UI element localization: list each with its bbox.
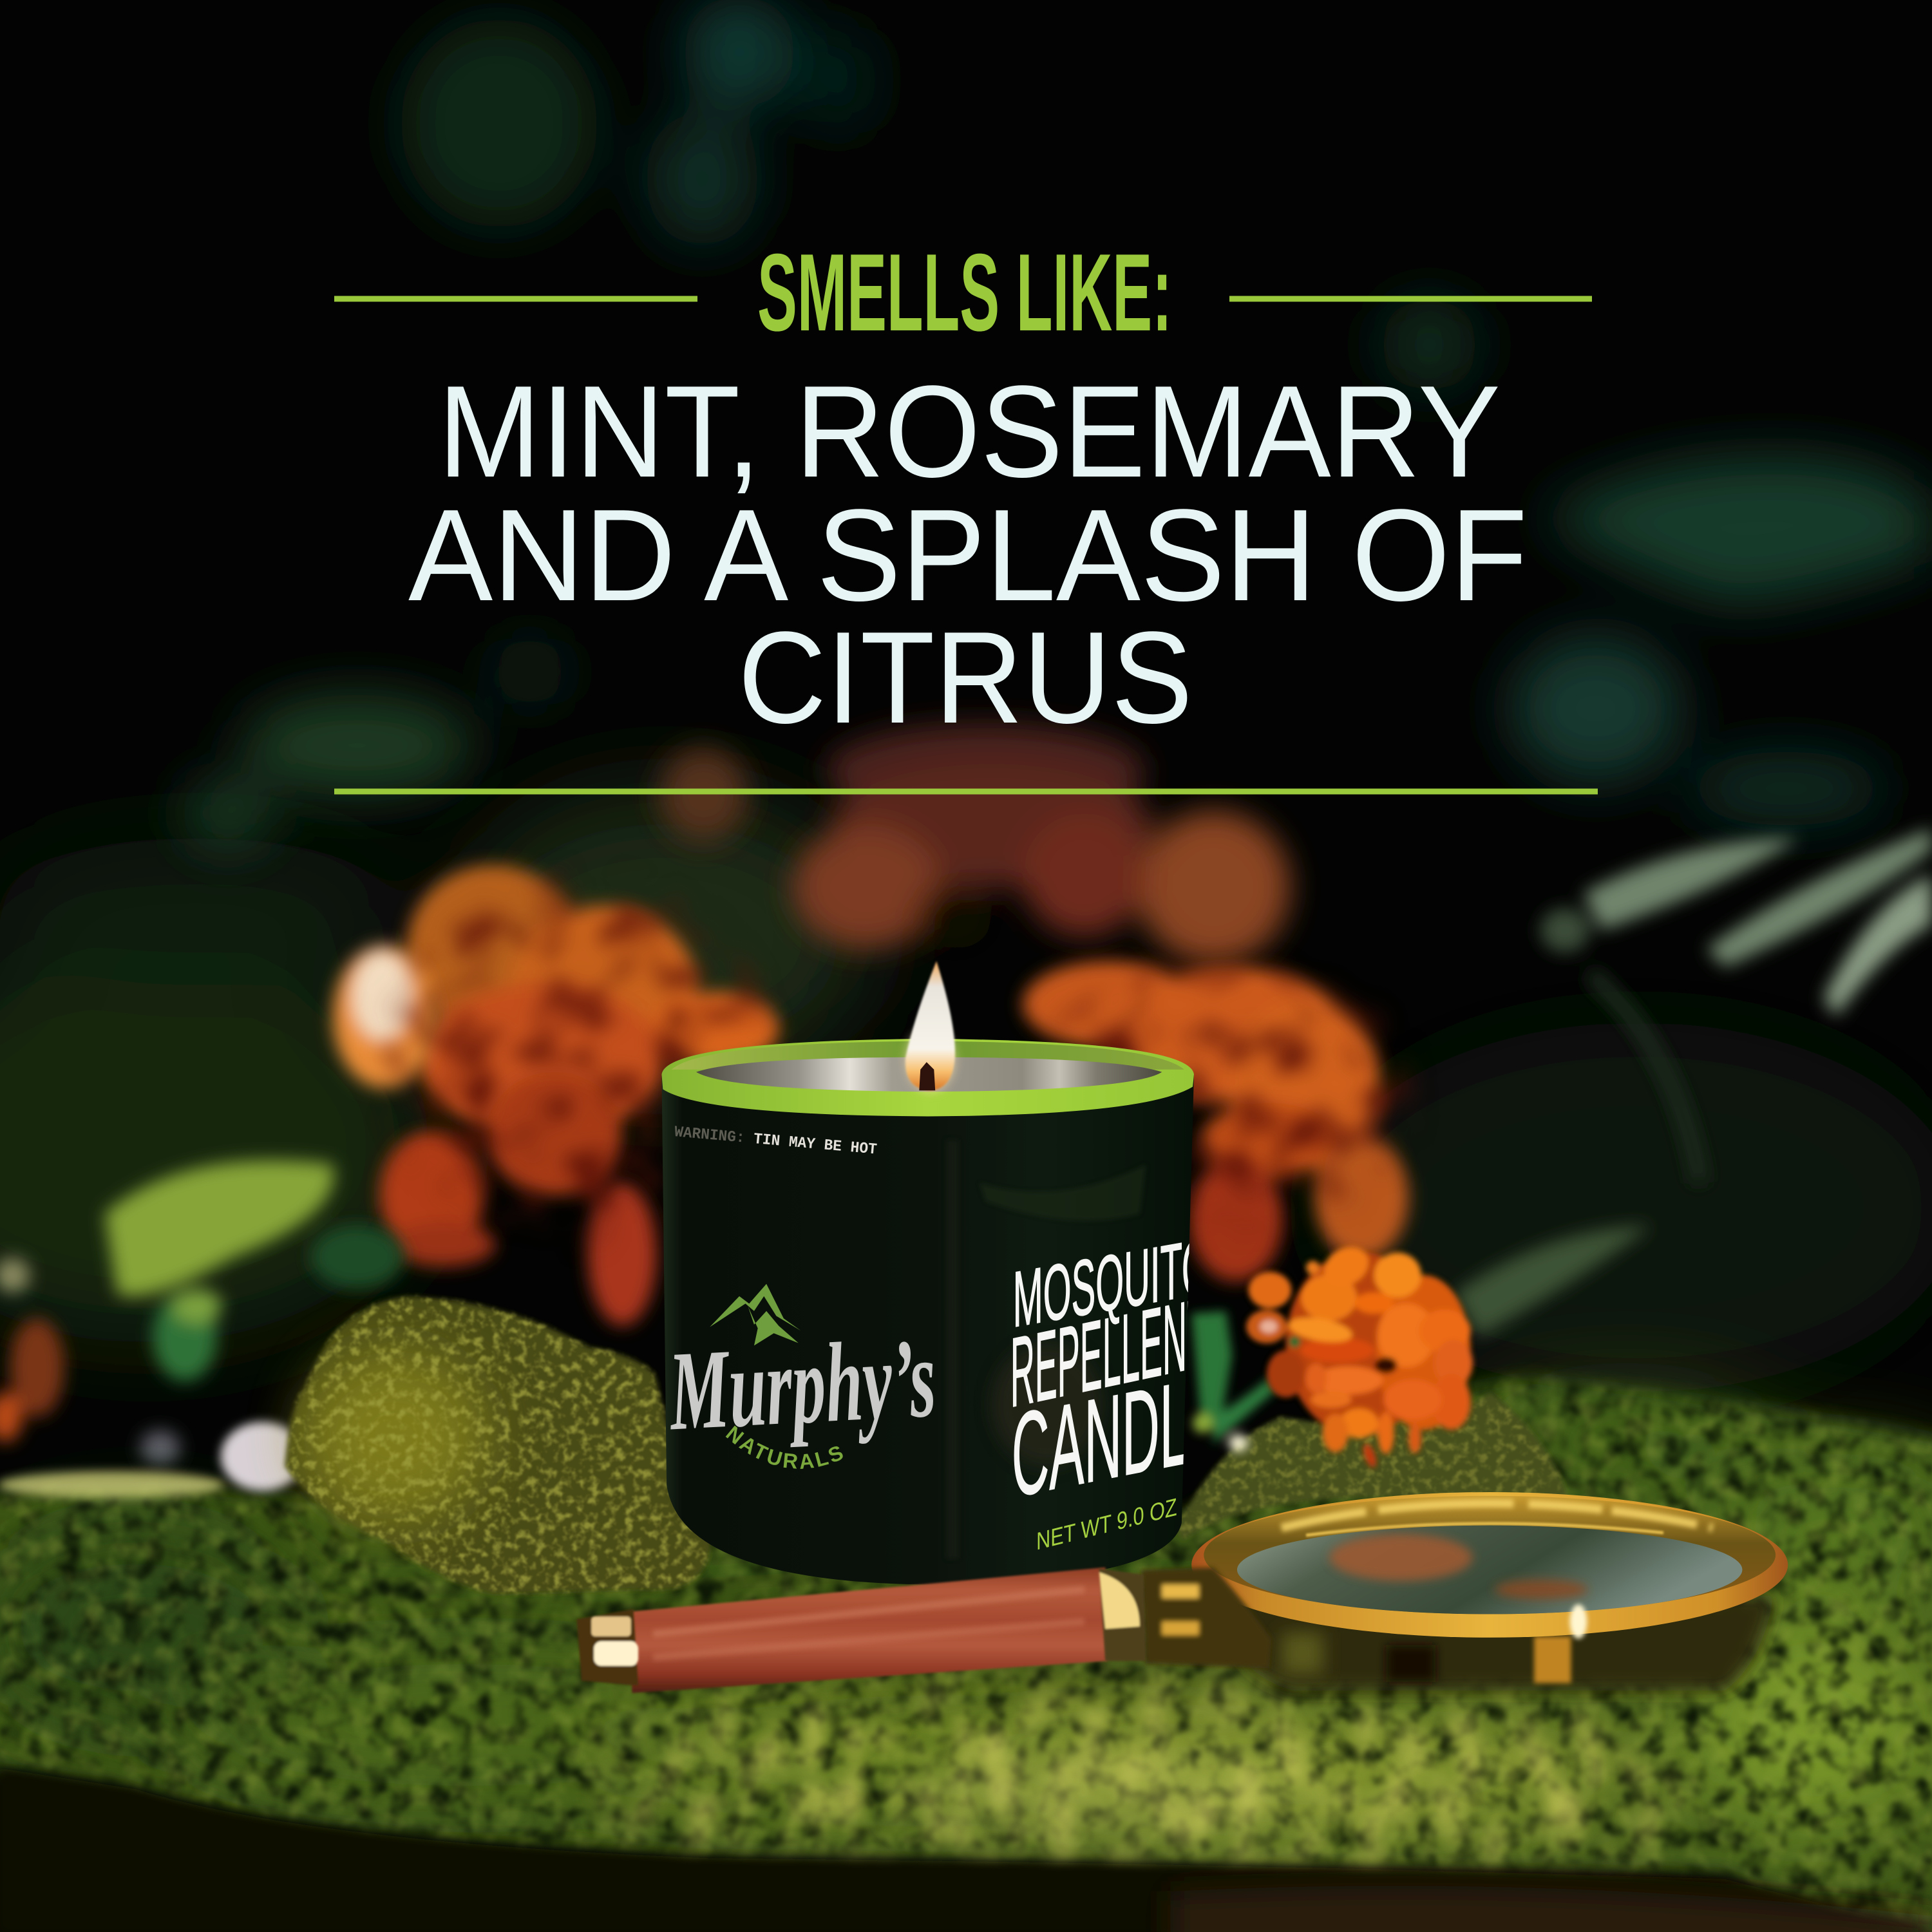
tin label artwork: MOSQUITO [1013, 1221, 1210, 1344]
bottom rule [334, 788, 1598, 795]
blurred foliage backdrop [0, 0, 1932, 1392]
photo background with candle scene: REPELLENT [1010, 1276, 1208, 1428]
rim highlights [1282, 1503, 1712, 1528]
title group: smells like [334, 231, 1592, 354]
net weight: NET WT 9.0 OZ (255g) [1036, 1478, 1240, 1556]
background orange flowers [333, 723, 1408, 1326]
left rule [334, 296, 697, 301]
lichen clump right of candle [1177, 1392, 1567, 1540]
scent description text: AND A SPLASH OF [408, 482, 1528, 629]
orange marigold flower [1246, 1239, 1473, 1469]
handle end cap [576, 1609, 638, 1685]
logo wordmark: Murphy’s [665, 1315, 938, 1454]
mountain logo [710, 1284, 801, 1345]
magnifying glass [576, 1492, 1788, 1693]
candle tin [661, 1039, 1194, 1584]
scent description text: MINT, ROSEMARY [438, 359, 1501, 505]
lichen clump left of candle [285, 1296, 711, 1595]
scent description text: CITRUS [738, 605, 1193, 751]
moss covered log [0, 1378, 1932, 1932]
heading: smells like: SMELLS LIKE: [757, 231, 1172, 354]
tin body [661, 1074, 1194, 1585]
warning text: WARNING: TIN MAY BE HOT [674, 1124, 878, 1159]
lens glass [1237, 1526, 1742, 1614]
tin label artwork [674, 1124, 1240, 1558]
candle flame [905, 961, 955, 1092]
logo naturals text: NATURALS [725, 1426, 843, 1469]
handle neck [1141, 1567, 1272, 1669]
green stem behind flower [1191, 1311, 1276, 1452]
product name [1010, 1221, 1224, 1522]
right rule [1229, 296, 1592, 301]
tin opening [696, 1057, 1162, 1092]
background green leaves left [0, 1160, 404, 1465]
scent description text [408, 359, 1528, 751]
wick [919, 1062, 935, 1090]
wooden handle [630, 1567, 1108, 1693]
handle collar [1099, 1569, 1146, 1661]
lit moss edge [0, 1471, 224, 1499]
lens body below rim [1214, 1596, 1774, 1690]
pale object behind moss [220, 1422, 305, 1491]
tin rim [661, 1039, 1194, 1116]
lens rim [1191, 1492, 1788, 1638]
dark bark below moss [0, 1768, 1932, 1932]
photo background with candle scene: CANDLE [1012, 1349, 1224, 1522]
lens glint [1570, 1604, 1587, 1639]
